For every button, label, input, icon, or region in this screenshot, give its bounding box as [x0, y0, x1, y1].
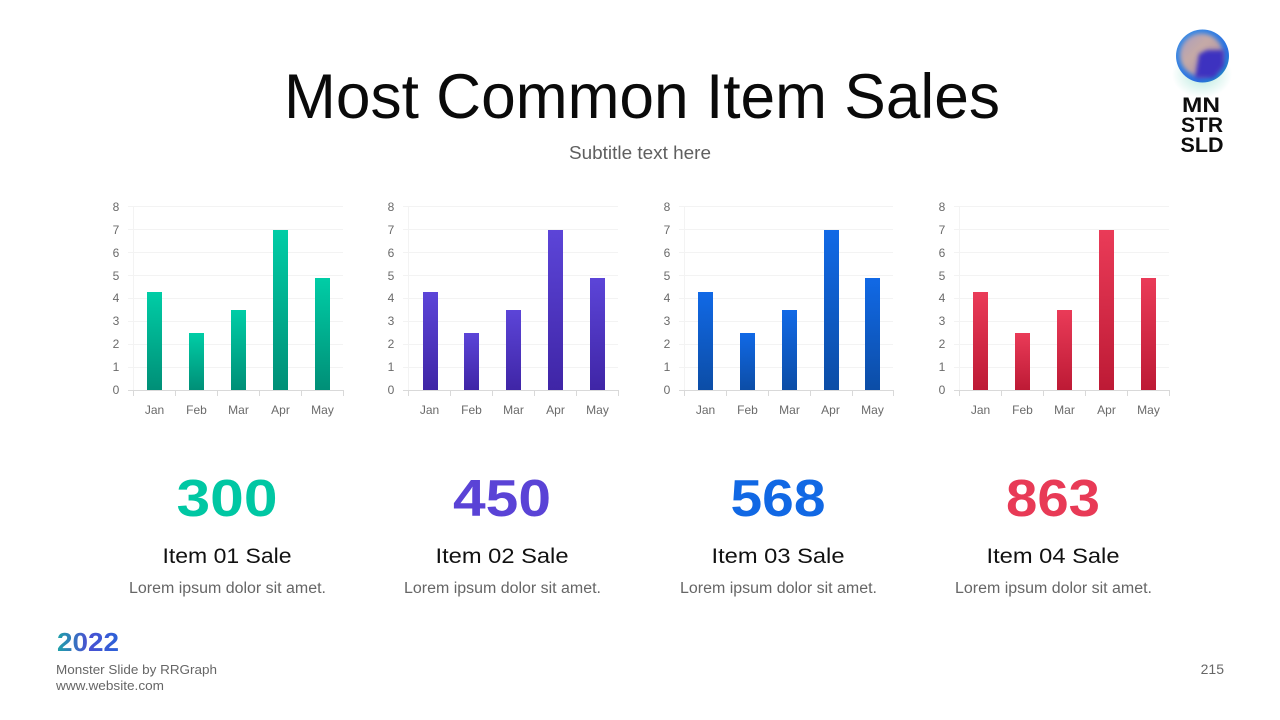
logo wordmark: SLD: [1180, 133, 1224, 157]
bar chart: item 02: 1: [388, 360, 395, 374]
bar chart: item 02: 7: [388, 223, 395, 237]
bar chart: item 01: Feb: [186, 403, 207, 417]
bar chart: item 02: 0: [388, 383, 395, 397]
bar chart: item 04: 8: [939, 200, 946, 214]
bar chart: item 02: Feb: [461, 403, 482, 417]
stat: item 01: 300: [176, 470, 278, 528]
bar chart: item 03: 4: [664, 291, 671, 305]
footer: year: 2022: [57, 627, 119, 657]
stat: item 02: Item 02 Sale: [436, 545, 568, 568]
bar chart: item 01: Mar: [228, 403, 249, 417]
page number: 215: [1201, 661, 1224, 677]
bar chart: item 02: May: [586, 403, 609, 417]
bar chart: item 04: 2: [939, 337, 946, 351]
bar chart: item 03: 0: [664, 383, 671, 397]
bar chart: item 02: 2: [388, 337, 395, 351]
footer: credits: www.website.com: [55, 678, 164, 693]
bar chart: item 01: 8: [113, 200, 120, 214]
bar chart: item 04: 5: [939, 269, 946, 283]
bar chart: item 04: [939, 200, 1170, 417]
bar chart: item 01: 1: [113, 360, 120, 374]
bar chart: item 04: 6: [939, 246, 946, 260]
bar chart: item 03: 1: [664, 360, 671, 374]
bar chart: item 04: 7: [939, 223, 946, 237]
bar chart: item 01: 7: [113, 223, 120, 237]
footer: credits: [55, 662, 217, 693]
stat: item 03: 568: [730, 470, 826, 528]
stat: item 01: [129, 470, 326, 597]
bar chart: item 04: 3: [939, 314, 946, 328]
bar chart: item 04: 1: [939, 360, 946, 374]
bar chart: item 01: 2: [113, 337, 120, 351]
bar chart: item 03: 6: [664, 246, 671, 260]
bar chart: item 01: May: [311, 403, 334, 417]
bar chart: item 04: May: [1137, 403, 1160, 417]
stat: item 02: 450: [453, 470, 551, 528]
footer: credits: Monster Slide by RRGraph: [56, 662, 217, 677]
bar chart: item 03: [664, 200, 894, 417]
stat: item 02: Lorem ipsum dolor sit amet.: [404, 580, 601, 597]
logo wordmark: STR: [1181, 113, 1223, 137]
stat: item 03: Lorem ipsum dolor sit amet.: [680, 580, 877, 597]
bar chart: item 01: 5: [113, 269, 120, 283]
bar chart: item 03: Apr: [821, 403, 840, 417]
bar chart: item 04: Apr: [1097, 403, 1116, 417]
bar chart: item 02: 3: [388, 314, 395, 328]
bar chart: item 01: [113, 200, 344, 417]
bar chart: item 01: Apr: [271, 403, 290, 417]
subtitle: Subtitle text here: [569, 142, 711, 163]
bar chart: item 03: 8: [664, 200, 671, 214]
bar chart: item 04: 0: [939, 383, 946, 397]
stat: item 03: [680, 470, 877, 597]
bar chart: item 02: Jan: [420, 403, 439, 417]
bar chart: item 03: Jan: [696, 403, 715, 417]
stat: item 04: Lorem ipsum dolor sit amet.: [955, 580, 1152, 597]
bar chart: item 04: Feb: [1012, 403, 1033, 417]
bar chart: item 02: [388, 200, 618, 417]
bar chart: item 01: 0: [113, 383, 120, 397]
bar chart: item 04: Mar: [1054, 403, 1075, 417]
bar chart: item 01: 6: [113, 246, 120, 260]
bar chart: item 02: 6: [388, 246, 395, 260]
stat: item 04: [955, 470, 1152, 597]
logo wordmark: MN: [1182, 93, 1220, 117]
stat: item 03: Item 03 Sale: [712, 545, 844, 568]
stat: item 04: 863: [1006, 470, 1100, 528]
stat: item 01: Lorem ipsum dolor sit amet.: [129, 580, 326, 597]
bar chart: item 03: 7: [664, 223, 671, 237]
bar chart: item 02: 5: [388, 269, 395, 283]
bar chart: item 02: 8: [388, 200, 395, 214]
bar chart: item 02: Mar: [503, 403, 524, 417]
bar chart: item 03: Mar: [779, 403, 800, 417]
title: Most Common Item Sales: [284, 62, 1000, 132]
logo wordmark: [1180, 93, 1224, 157]
bar chart: item 04: 4: [939, 291, 946, 305]
bar chart: item 02: 4: [388, 291, 395, 305]
bar chart: item 03: Feb: [737, 403, 758, 417]
bar chart: item 03: 3: [664, 314, 671, 328]
bar chart: item 01: Jan: [145, 403, 164, 417]
bar chart: item 03: May: [861, 403, 884, 417]
bar chart: item 01: 4: [113, 291, 120, 305]
bar chart: item 04: Jan: [971, 403, 990, 417]
stat: item 01: Item 01 Sale: [162, 545, 292, 568]
bar chart: item 03: 2: [664, 337, 671, 351]
bar chart: item 03: 5: [664, 269, 671, 283]
stat: item 04: Item 04 Sale: [986, 545, 1120, 568]
bar chart: item 02: Apr: [546, 403, 565, 417]
logo: [1175, 30, 1229, 152]
bar chart: item 01: 3: [113, 314, 120, 328]
stat: item 02: [404, 470, 601, 597]
icon: orb: [1175, 30, 1229, 96]
